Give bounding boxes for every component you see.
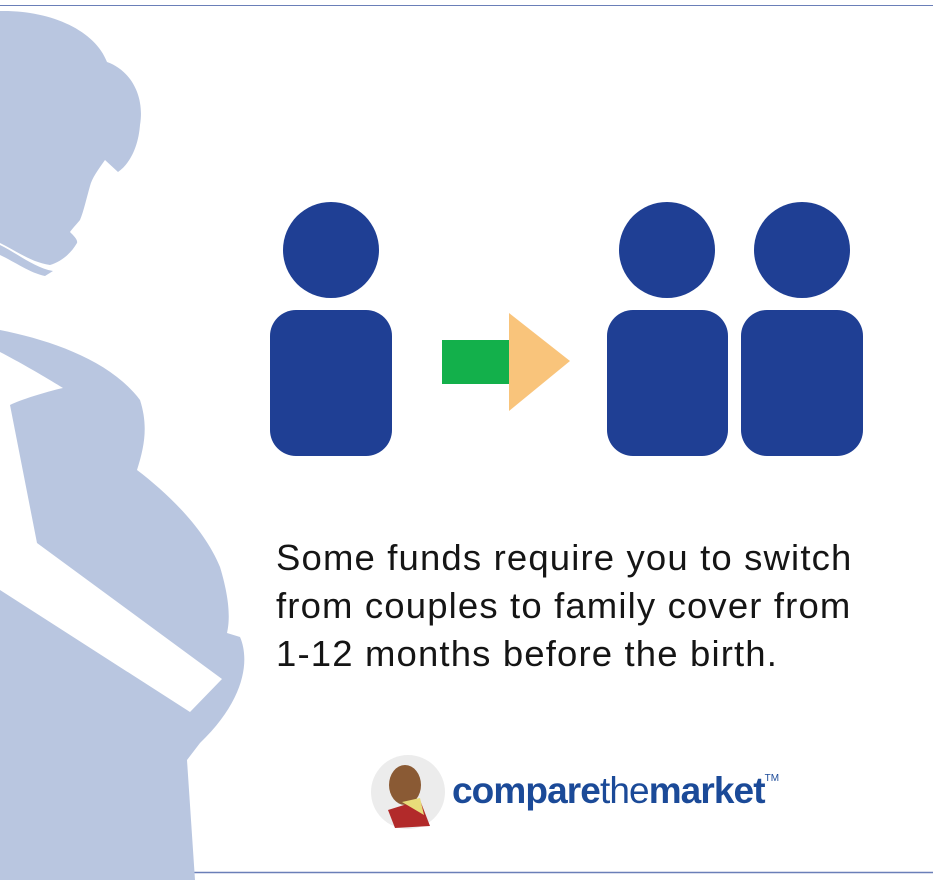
text block [276, 537, 852, 674]
logo text: comparethemarketTM [452, 770, 779, 811]
icon: meerkat logo badge [371, 755, 445, 829]
text block: Some funds require you to switch [276, 537, 852, 578]
text block: 1-12 months before the birth. [276, 633, 778, 674]
icon: two people [607, 202, 863, 456]
silhouette: pregnant woman [0, 11, 244, 880]
text block: from couples to family cover from [276, 585, 851, 626]
arrow [442, 313, 570, 411]
